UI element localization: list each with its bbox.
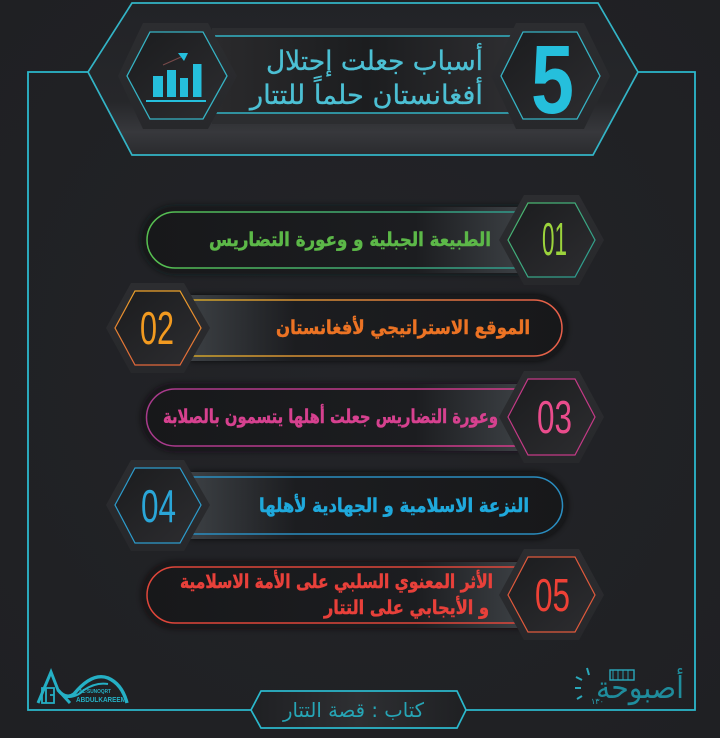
logo: right: ١٣٠ [591, 697, 604, 706]
hexagon 3: 03 [537, 391, 572, 443]
footer book label [251, 691, 466, 728]
icon: bar chart hexagon [118, 23, 237, 129]
text 1: الطبيعة الجبلية و وعورة التضاريس [209, 229, 491, 251]
row 5 [142, 549, 604, 640]
logo: left: AL-SUNOQRT [79, 689, 111, 695]
pill 1 [141, 206, 522, 274]
header hexagon outline [88, 3, 638, 155]
text 2: الموقع الاستراتيجي لأفغانستان [276, 316, 530, 339]
row 3 [141, 371, 604, 463]
hexagon 5 [499, 549, 604, 640]
hexagon 1: 01 [542, 213, 567, 265]
big number 5 hexagon [491, 23, 610, 134]
hexagon 2: 02 [140, 302, 174, 354]
title text [248, 42, 483, 111]
text 5 [180, 570, 493, 619]
title text: أسباب جعلت إحتلال [266, 42, 483, 77]
pill 2 [190, 295, 567, 361]
row 1 [141, 195, 604, 285]
logo: right: أصبوحة [596, 667, 684, 706]
pill 3 [141, 384, 522, 451]
hexagon 5: 05 [535, 569, 570, 621]
hexagon 1 [499, 195, 604, 285]
text 5: و الأيجابي على التتار [323, 596, 489, 619]
hexagon 2 [106, 283, 210, 373]
logo: left: ABDULKAREEM [76, 697, 126, 704]
logo: right [575, 667, 684, 706]
hexagon 4: 04 [141, 480, 176, 532]
pill 5 [142, 562, 522, 628]
header panel [88, 3, 638, 155]
title band [212, 28, 520, 124]
row 4 [106, 460, 568, 551]
footer book label: كتاب : قصة التتار [282, 698, 424, 722]
pill 4 [190, 472, 568, 539]
text 4: النزعة الاسلامية و الجهادية لأهلها [259, 494, 529, 517]
big number 5 hexagon: 5 [531, 25, 574, 134]
text 5: الأثر المعنوي السلبي على الأمة الاسلامية [180, 570, 493, 594]
title text: أفغانستان حلماً للتتار [248, 75, 483, 111]
text 3: وعورة التضاريس جعلت أهلها يتسمون بالصلابة [163, 404, 498, 428]
hexagon 3 [499, 371, 604, 463]
row 2 [106, 283, 567, 373]
logo: left [38, 672, 127, 704]
hexagon 4 [106, 460, 210, 551]
